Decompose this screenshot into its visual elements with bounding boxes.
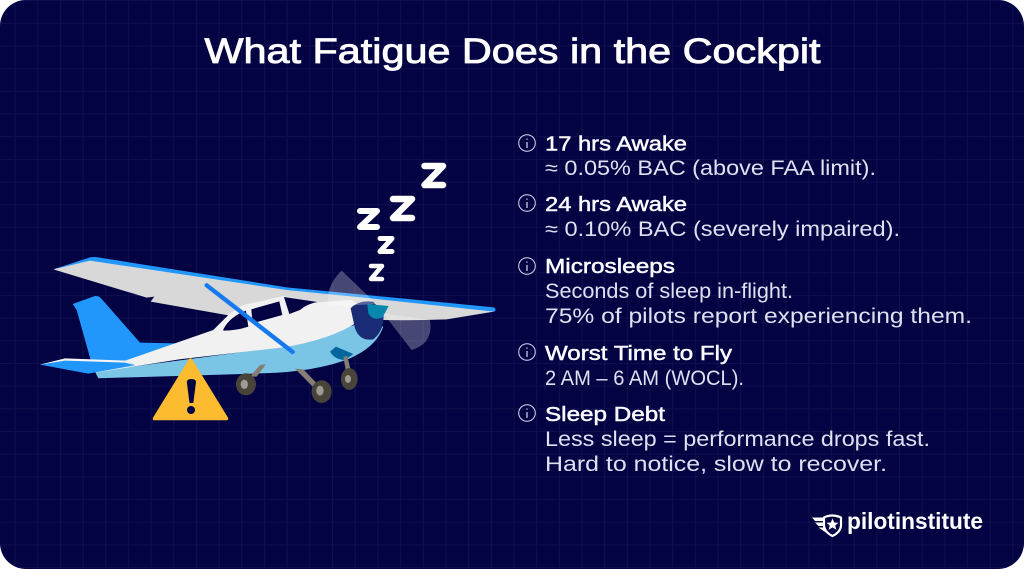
fact: sleep debt: Hard to notice, slow to recover.: [545, 453, 887, 476]
fact: microsleeps: Seconds of sleep in-flight.: [545, 280, 793, 303]
fact: worst time to fly: Worst Time to Fly: [545, 342, 733, 365]
propeller blades: [328, 271, 431, 350]
icon: info: [519, 344, 535, 360]
fact: 17 hrs awake: 17 hrs Awake: [545, 132, 687, 156]
fuselage belly: [95, 323, 383, 378]
cockpit windows: [223, 297, 317, 331]
tail fin: [73, 296, 177, 363]
fact: microsleeps: [519, 255, 972, 328]
fuselage top: [95, 296, 363, 373]
fact: microsleeps: 75% of pilots report experiencing them.: [545, 305, 972, 328]
logo: pilotinstitute: [847, 508, 983, 534]
wing: [53, 258, 495, 320]
cowl scoop: [330, 347, 353, 360]
icon: info: [519, 195, 535, 211]
airplane illustration: [40, 257, 496, 403]
icon: winged shield: [812, 516, 841, 536]
wing leading edge: [53, 257, 496, 312]
fact: 24 hrs awake: ≈ 0.10% BAC (severely impaired).: [545, 218, 900, 241]
engine cowl: [351, 301, 384, 340]
fact: 17 hrs awake: [519, 132, 876, 180]
warning triangle: [154, 360, 226, 418]
fact: microsleeps: Microsleeps: [545, 255, 675, 278]
fact: 17 hrs awake: ≈ 0.05% BAC (above FAA limit).: [545, 157, 876, 180]
horizontal stabilizer: [40, 359, 135, 374]
wing strut: [207, 285, 293, 352]
fact: sleep debt: [519, 403, 930, 476]
landing gear: [236, 356, 358, 403]
fact: sleep debt: Sleep Debt: [545, 403, 665, 426]
fact: 24 hrs awake: [519, 193, 900, 241]
fact: 24 hrs awake: 24 hrs Awake: [545, 193, 687, 216]
sleep letters: [360, 166, 443, 279]
icon: info: [519, 258, 535, 274]
fact: worst time to fly: 2 AM – 6 AM (WOCL).: [545, 367, 744, 390]
propeller hub: [367, 304, 389, 319]
icon: info: [519, 405, 535, 421]
fact: sleep debt: Less sleep = performance drops fast.: [545, 428, 930, 451]
icon: info: [519, 135, 535, 151]
fact: worst time to fly: [519, 342, 744, 390]
title: What Fatigue Does in the Cockpit: [204, 31, 821, 71]
